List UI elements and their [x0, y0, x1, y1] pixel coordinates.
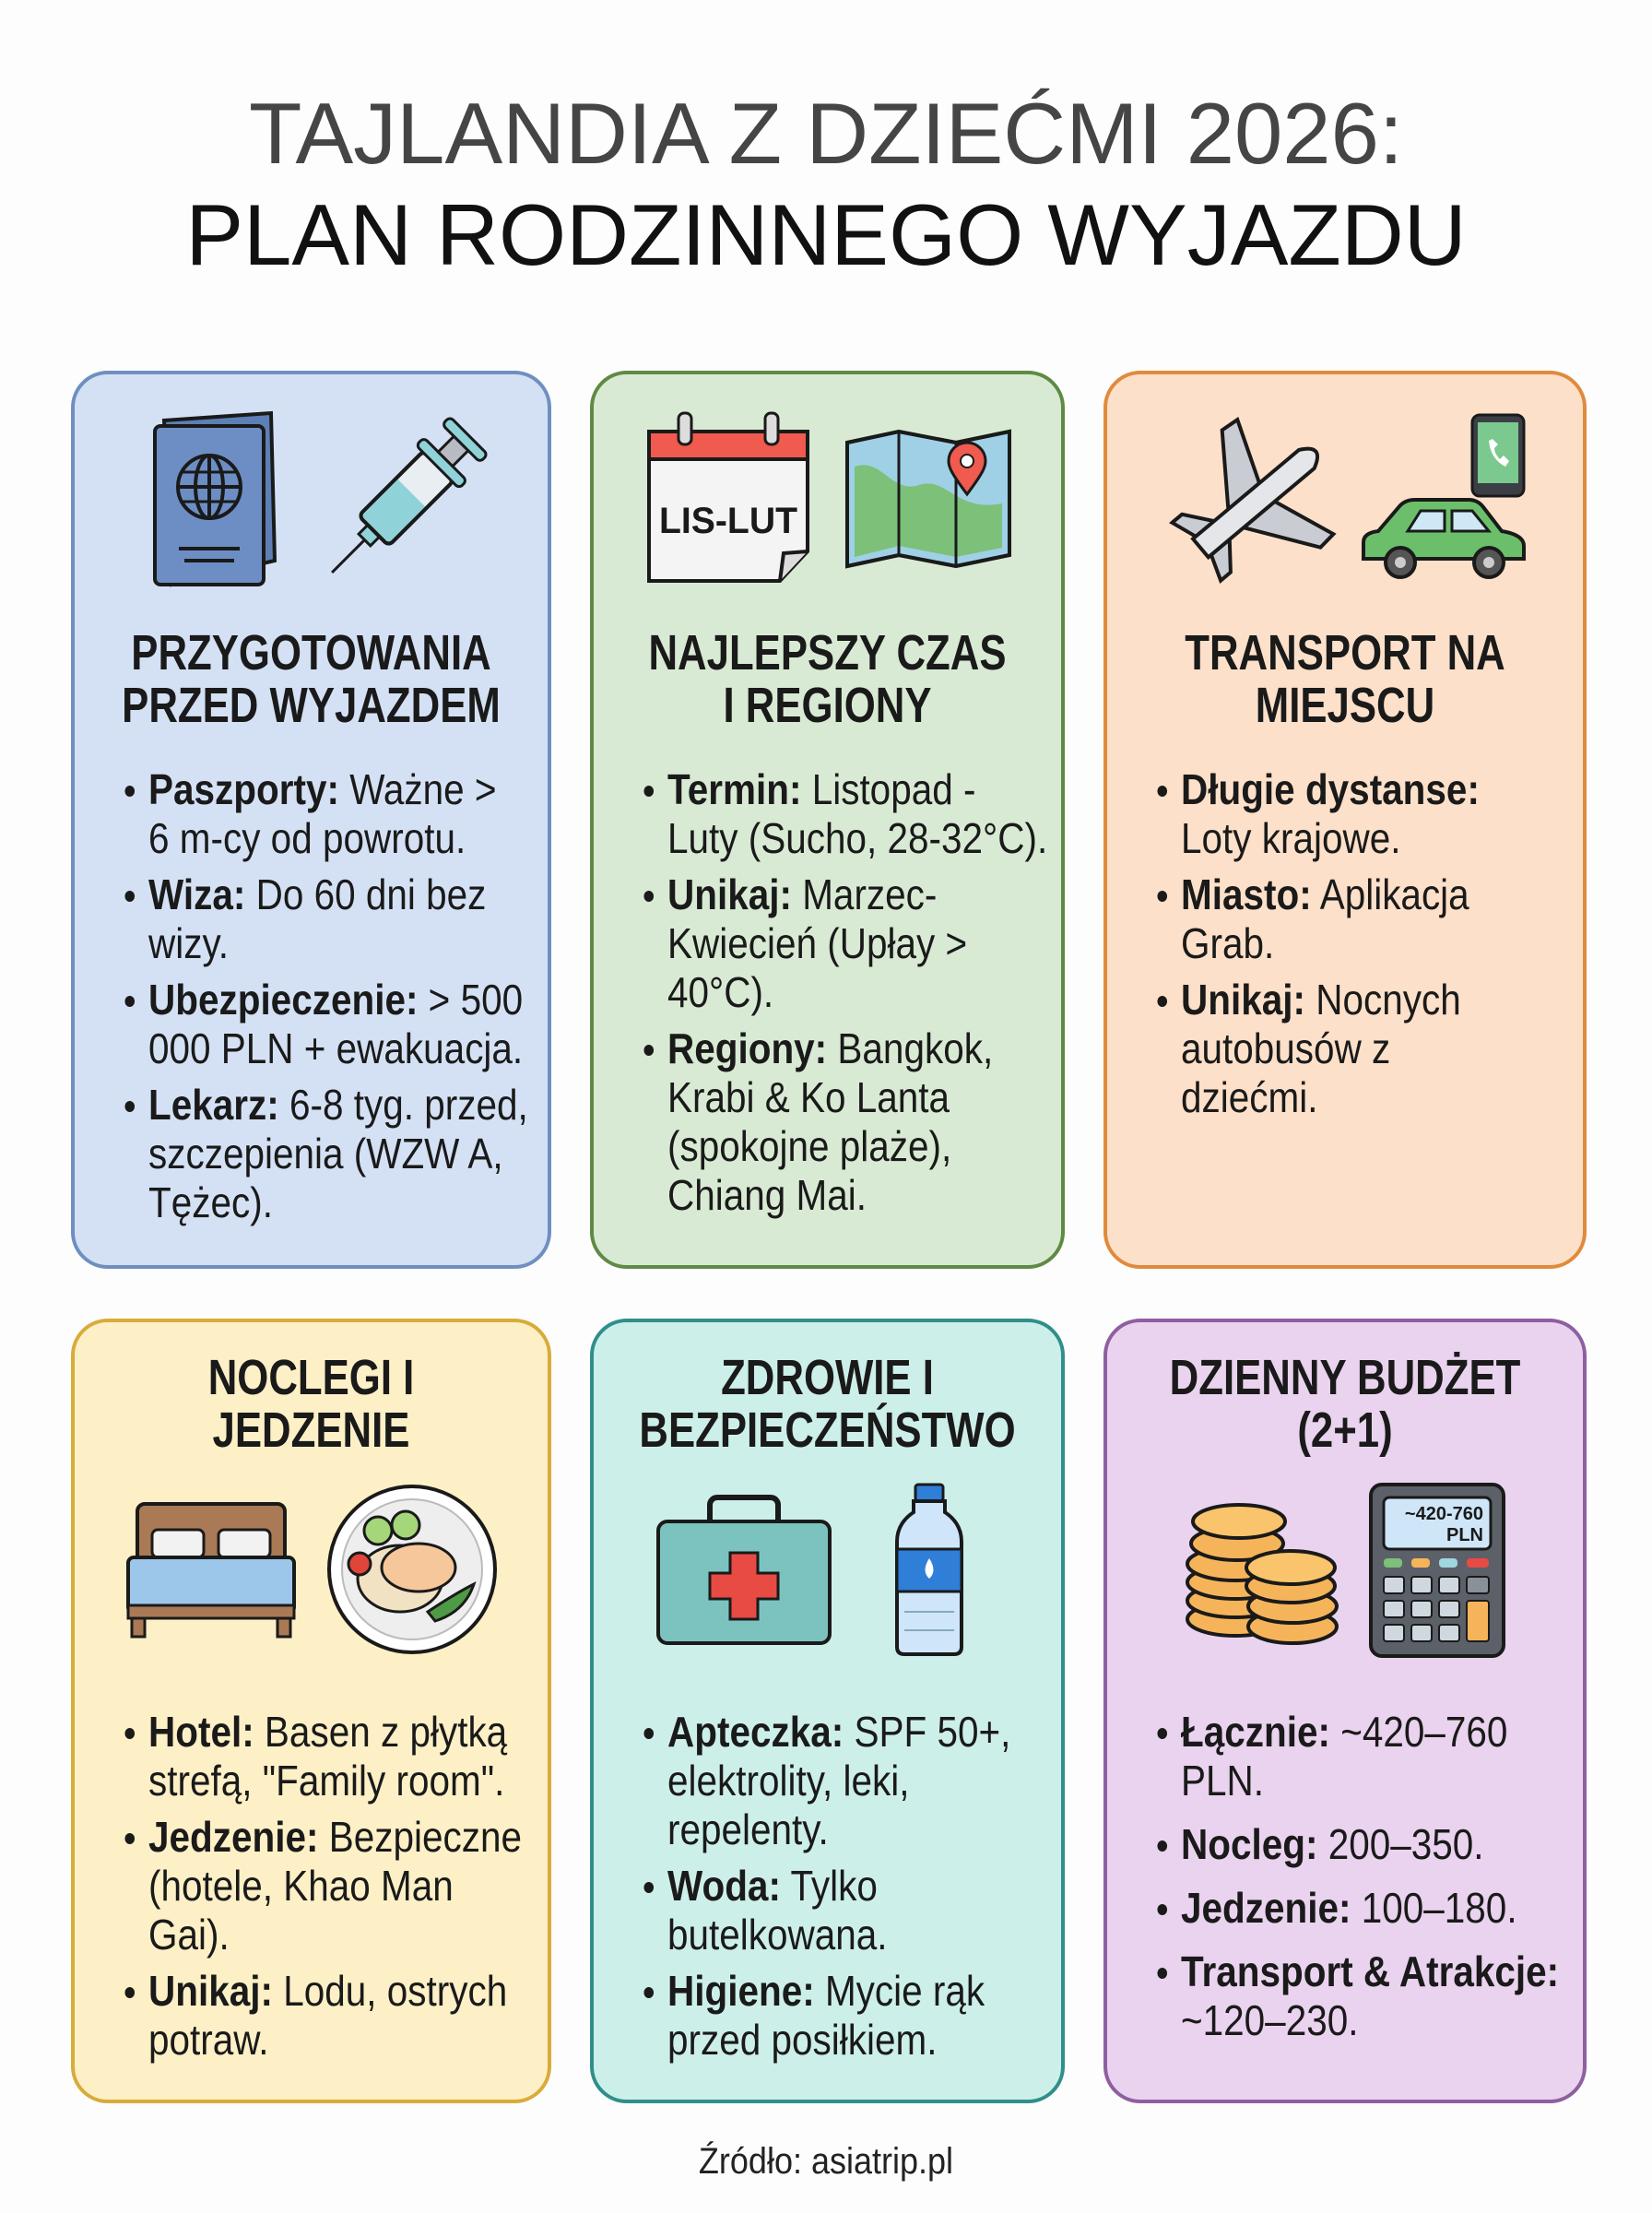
bullets: najlepszy czas: Regiony: Bangkok,	[667, 1024, 993, 1072]
icon: water bottle	[895, 1483, 963, 1656]
heading: najlepszy czas	[648, 625, 1007, 733]
bullets: zdrowie: elektrolity, leki,	[667, 1757, 909, 1805]
bullets: przygotowania	[125, 765, 528, 1226]
bullets: noclegi: potraw.	[148, 2016, 269, 2064]
bullets: budzet: Jedzenie: 100–180.	[1181, 1884, 1517, 1932]
bullets: budzet: ~120–230.	[1181, 1996, 1358, 2044]
heading: budzet: (2+1)	[1297, 1402, 1393, 1458]
bullets: najlepszy czas: (spokojne plaże),	[667, 1122, 951, 1170]
bullets: przygotowania: 000 PLN + ewakuacja.	[148, 1024, 523, 1072]
bullets: noclegi: strefą, "Family room".	[148, 1757, 504, 1805]
panel: najlepszy czas	[590, 371, 1065, 1269]
panel: zdrowie	[590, 1319, 1065, 2103]
bullets: przygotowania: szczepienia (WZW A,	[148, 1130, 503, 1178]
panel: przygotowania	[71, 371, 551, 1269]
bullets: przygotowania: Ubezpieczenie: > 500	[148, 976, 523, 1024]
bullets: transport: Miasto: Aplikacja	[1181, 870, 1469, 918]
heading: noclegi: JEDZENIE	[213, 1402, 409, 1458]
bullets: transport: dziećmi.	[1181, 1073, 1317, 1121]
bullets: zdrowie: przed posiłkiem.	[667, 2016, 937, 2064]
source: Źródło: asiatrip.pl	[699, 2141, 953, 2182]
bullets: najlepszy czas: 40°C).	[667, 968, 773, 1016]
heading: przygotowania: PRZED WYJAZDEM	[122, 678, 501, 733]
icon: phone	[1471, 413, 1525, 498]
title	[185, 85, 1467, 283]
heading: transport: MIEJSCU	[1256, 678, 1434, 733]
bullets: przygotowania: Wiza: Do 60 dni bez	[148, 870, 486, 918]
bullets: zdrowie: repelenty.	[667, 1805, 829, 1853]
heading: transport	[1185, 625, 1505, 733]
bullets: budzet: Łącznie: ~420–760	[1181, 1708, 1507, 1756]
bullets: transport: Loty krajowe.	[1181, 814, 1400, 862]
bullets: noclegi: Hotel: Basen z płytką	[148, 1708, 507, 1756]
bullets: budzet	[1158, 1708, 1559, 2044]
bullets: budzet: PLN.	[1181, 1757, 1264, 1805]
bullets: transport: Długie dystanse:	[1181, 765, 1480, 813]
title: PLAN RODZINNEGO WYJAZDU	[185, 186, 1467, 283]
bullets: budzet: Transport & Atrakcje:	[1181, 1947, 1559, 1995]
heading: zdrowie	[639, 1350, 1016, 1458]
icon: passport	[153, 411, 277, 586]
bullets: najlepszy czas: Unikaj: Marzec-	[667, 870, 937, 918]
bullets: zdrowie	[643, 1708, 1010, 2064]
heading: budzet: DZIENNY BUDŻET	[1170, 1350, 1520, 1405]
panel: transport	[1103, 371, 1587, 1269]
icon: coins	[1186, 1503, 1339, 1645]
icon: calculator: ~420-760	[1405, 1504, 1483, 1524]
bullets: przygotowania: 6 m-cy od powrotu.	[148, 814, 466, 862]
bullets: przygotowania: Tężec).	[148, 1178, 273, 1226]
panel: budzet	[1103, 1319, 1587, 2103]
bullets: zdrowie: Higiene: Mycie rąk	[667, 1967, 985, 2015]
bullets: noclegi: Gai).	[148, 1911, 230, 1959]
icon: calendar	[647, 411, 809, 583]
bullets: transport: Grab.	[1181, 919, 1274, 967]
bullets: najlepszy czas: Chiang Mai.	[667, 1171, 867, 1219]
icon: calculator	[1369, 1483, 1505, 1658]
bullets: noclegi: Jedzenie: Bezpieczne	[148, 1813, 522, 1861]
heading: zdrowie: BEZPIECZEŃSTWO	[639, 1402, 1016, 1458]
bullets: najlepszy czas: Luty (Sucho, 28-32°C).	[667, 814, 1047, 862]
heading: najlepszy czas: NAJLEPSZY CZAS	[648, 625, 1007, 680]
heading: zdrowie: ZDROWIE I	[721, 1350, 934, 1405]
heading: noclegi	[208, 1350, 414, 1458]
bullets: najlepszy czas: Krabi & Ko Lanta	[667, 1073, 950, 1121]
bullets: najlepszy czas: Termin: Listopad -	[667, 765, 975, 813]
bullets: przygotowania: Lekarz: 6-8 tyg. przed,	[148, 1081, 528, 1129]
icon: bed	[126, 1502, 296, 1638]
icon: map	[845, 430, 1011, 568]
bullets: transport: Unikaj: Nocnych	[1181, 976, 1461, 1024]
title: TAJLANDIA Z DZIEĆMI 2026:	[249, 85, 1403, 182]
panel: noclegi	[71, 1319, 551, 2103]
icon: first aid kit	[656, 1495, 832, 1645]
heading: budzet	[1170, 1350, 1520, 1458]
bullets: noclegi: Unikaj: Lodu, ostrych	[148, 1967, 507, 2015]
icon: car	[1362, 498, 1526, 579]
heading: transport: TRANSPORT NA	[1185, 625, 1505, 680]
bullets: transport: autobusów z	[1181, 1024, 1390, 1072]
icon: calculator: PLN	[1446, 1525, 1483, 1545]
bullets: zdrowie: Woda: Tylko	[667, 1862, 878, 1910]
bullets: zdrowie: Apteczka: SPF 50+,	[667, 1708, 1010, 1756]
bullets: przygotowania: Paszporty: Ważne >	[148, 765, 497, 813]
icon: plate	[327, 1485, 497, 1654]
bullets: transport	[1158, 765, 1480, 1121]
bullets: zdrowie: butelkowana.	[667, 1911, 888, 1959]
heading: najlepszy czas: I REGIONY	[723, 678, 932, 733]
bullets: najlepszy czas: Kwiecień (Upłay >	[667, 919, 967, 967]
bullets: przygotowania: wizy.	[148, 919, 229, 967]
heading: noclegi: NOCLEGI I	[208, 1350, 414, 1405]
icon: syringe	[331, 417, 487, 574]
bullets: najlepszy czas	[643, 765, 1047, 1219]
heading: przygotowania	[122, 625, 501, 733]
bullets: noclegi: (hotele, Khao Man	[148, 1862, 454, 1910]
heading: przygotowania: PRZYGOTOWANIA	[131, 625, 491, 680]
bullets: budzet: Nocleg: 200–350.	[1181, 1820, 1484, 1868]
bullets: noclegi	[125, 1708, 522, 2064]
icon: airplane	[1169, 417, 1337, 584]
icon: calendar: LIS-LUT	[659, 501, 797, 541]
